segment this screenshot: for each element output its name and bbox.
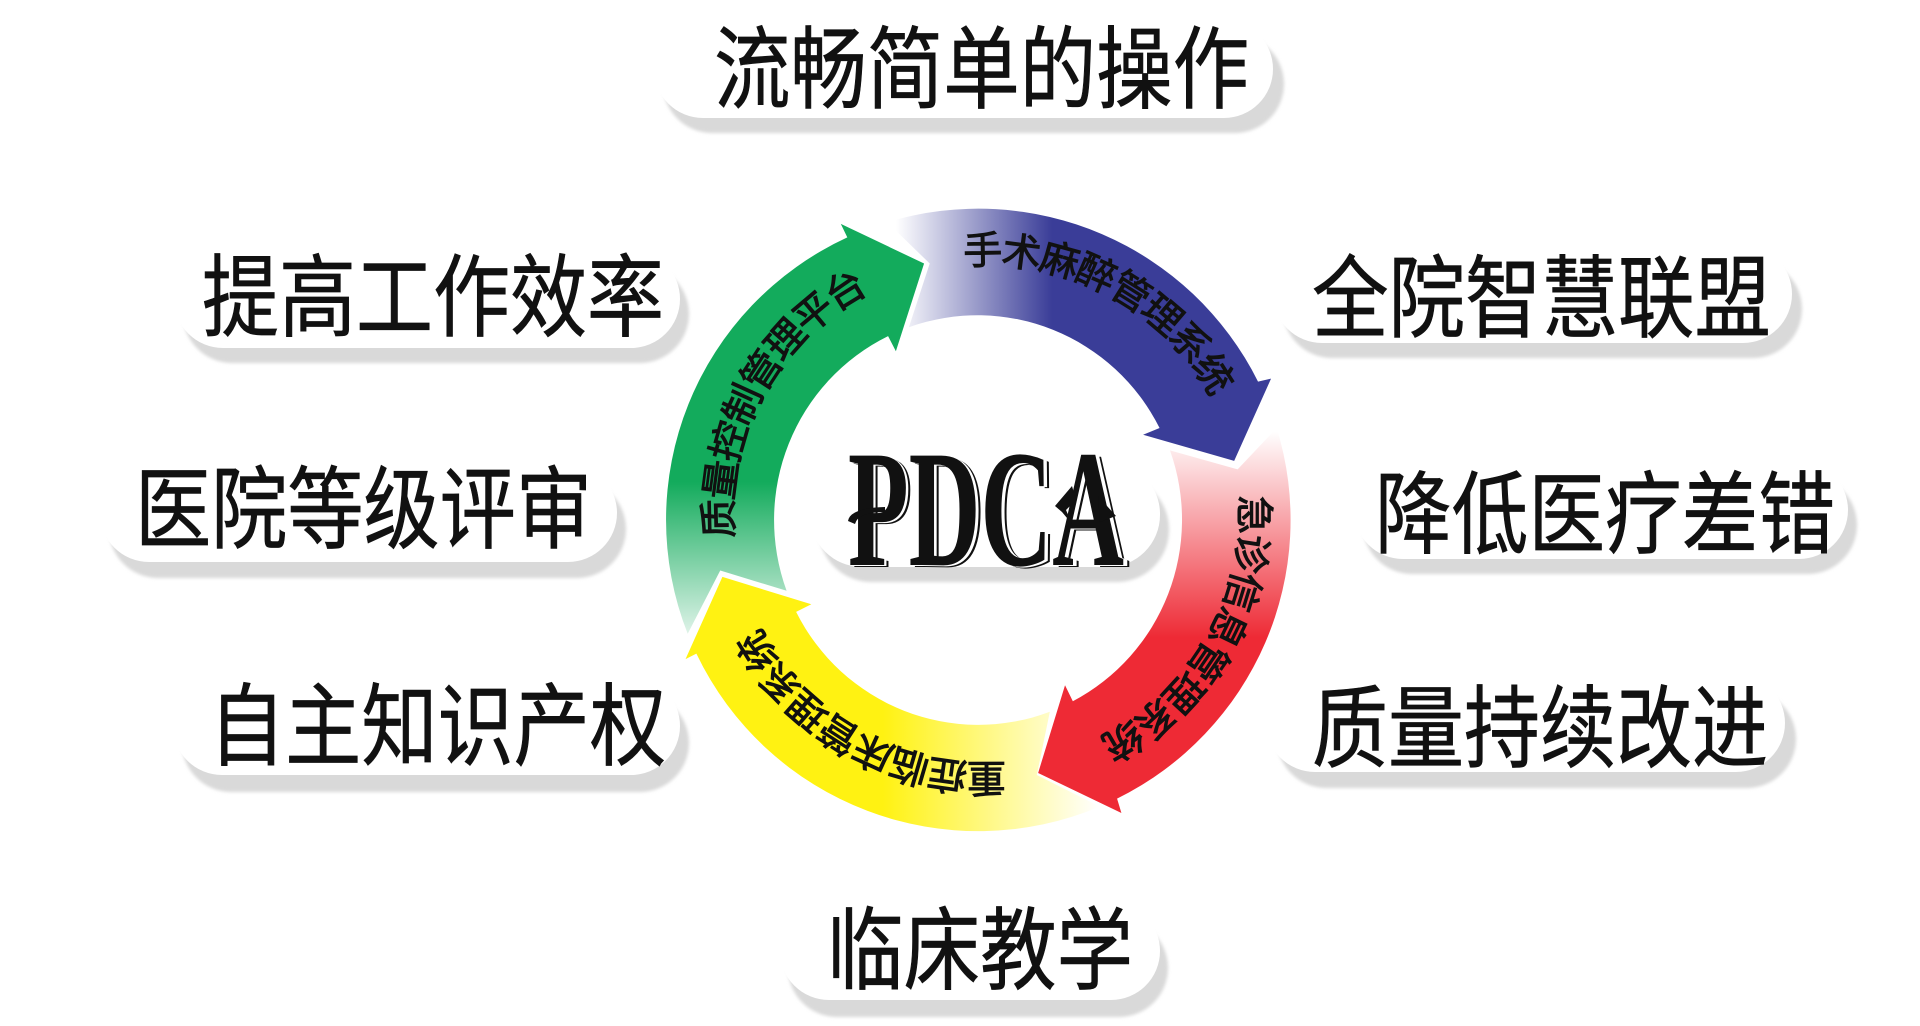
pill: upper right label: 全院智慧联盟	[1312, 250, 1771, 350]
pill: upper left label: 提高工作效率	[202, 249, 664, 349]
arrow: green	[666, 224, 924, 634]
pill: lower right label: 质量持续改进	[1312, 680, 1768, 780]
center pill: PDCA: PDCA	[852, 419, 1130, 604]
center pill: PDCA: PDCA	[848, 417, 1124, 602]
center pill: PDCA: PDCA	[850, 418, 1128, 603]
arrows	[666, 209, 1291, 831]
pill: lower left label: 自主知识产权	[209, 678, 666, 778]
arrow: yellow	[686, 577, 1100, 831]
pill: middle right label: 降低医疗差错	[1375, 466, 1835, 566]
ring text: blue arrow: 手术麻醉管理系统	[964, 230, 1235, 396]
pill: middle left label: 医院等级评审	[135, 461, 592, 561]
center pill: PDCA	[810, 417, 1169, 604]
ring text: red arrow: 急诊信息管理系统	[1100, 496, 1274, 762]
PDCA cycle ring	[666, 208, 1291, 832]
arrow: blue	[887, 209, 1271, 461]
pill: bottom label: 临床教学	[827, 902, 1133, 1002]
ring text: green arrow: 质量控制管理平台	[699, 274, 866, 538]
pill: top label: 流畅简单的操作	[714, 21, 1249, 121]
ring text: yellow arrow: 重症临床管理系统	[736, 628, 1004, 798]
arrow: red	[1038, 428, 1291, 813]
